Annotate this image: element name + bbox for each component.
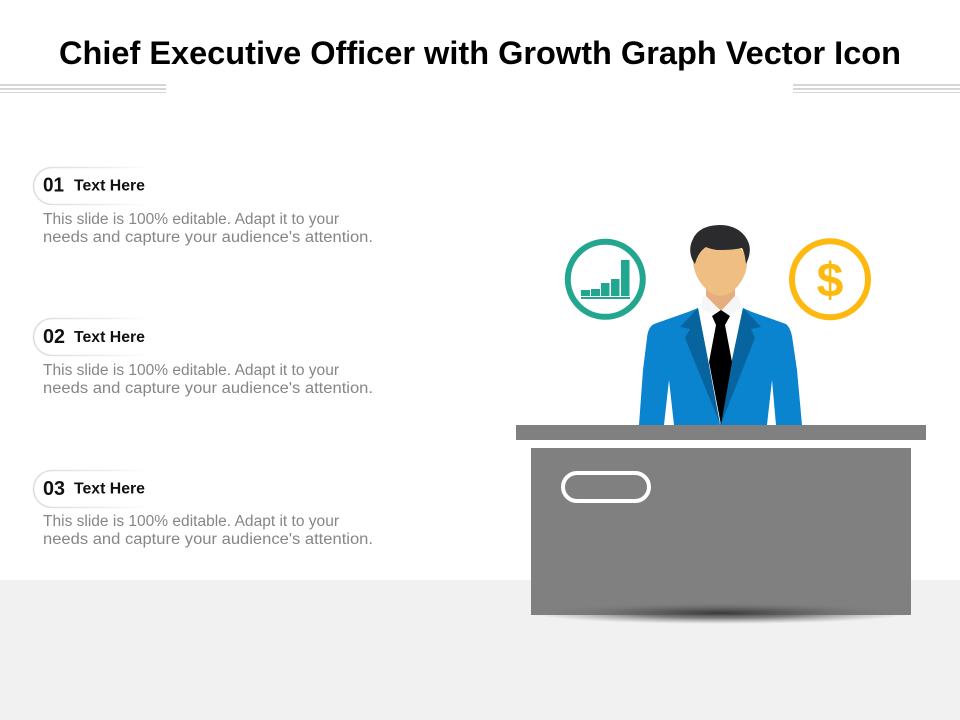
hair bbox=[690, 225, 750, 264]
icon: growth graph in teal circle bbox=[568, 242, 643, 317]
heading 01: Text Here bbox=[74, 178, 145, 194]
right lapel bbox=[721, 308, 761, 424]
item 01 bbox=[34, 168, 373, 246]
number pill 01 bbox=[34, 168, 150, 204]
number 01: 01 bbox=[43, 174, 64, 196]
body text 02: This slide is 100% editable. Adapt it to your bbox=[43, 362, 339, 379]
number pill 02 bbox=[34, 318, 150, 356]
item 03 bbox=[34, 470, 373, 548]
item 02 bbox=[34, 318, 373, 397]
number 03: 03 bbox=[43, 478, 65, 500]
tie bbox=[709, 310, 732, 425]
desk top bbox=[516, 425, 926, 440]
heading 02: Text Here bbox=[74, 329, 145, 346]
heading 03: Text Here bbox=[74, 480, 145, 498]
body text 01: This slide is 100% editable. Adapt it to your bbox=[43, 211, 339, 228]
body text 02: needs and capture your audience's attention. bbox=[43, 380, 373, 397]
left lapel bbox=[680, 308, 720, 424]
number pill 03 bbox=[34, 470, 150, 508]
icon: dollar in gold circle: $ bbox=[817, 254, 844, 308]
desk body bbox=[531, 448, 911, 615]
header rule: left bbox=[0, 84, 166, 93]
body text 03: This slide is 100% editable. Adapt it to your bbox=[43, 513, 339, 530]
header rule: right bbox=[793, 84, 960, 93]
title: Chief Executive Officer with Growth Graph Vector Icon bbox=[59, 35, 901, 71]
body text 03: needs and capture your audience's attention. bbox=[43, 531, 373, 548]
desk shadow bbox=[531, 602, 911, 624]
desk handle bbox=[563, 473, 649, 501]
face bbox=[693, 246, 747, 296]
neck bbox=[706, 288, 735, 311]
figure: chief executive officer bbox=[639, 225, 802, 425]
number 02: 02 bbox=[43, 326, 65, 348]
icon: dollar in gold circle bbox=[792, 241, 868, 317]
shirt bbox=[699, 296, 743, 425]
collar shading bbox=[700, 296, 742, 316]
floor band bbox=[0, 580, 960, 720]
body text 01: needs and capture your audience's attention. bbox=[43, 229, 373, 246]
jacket bbox=[639, 308, 802, 425]
